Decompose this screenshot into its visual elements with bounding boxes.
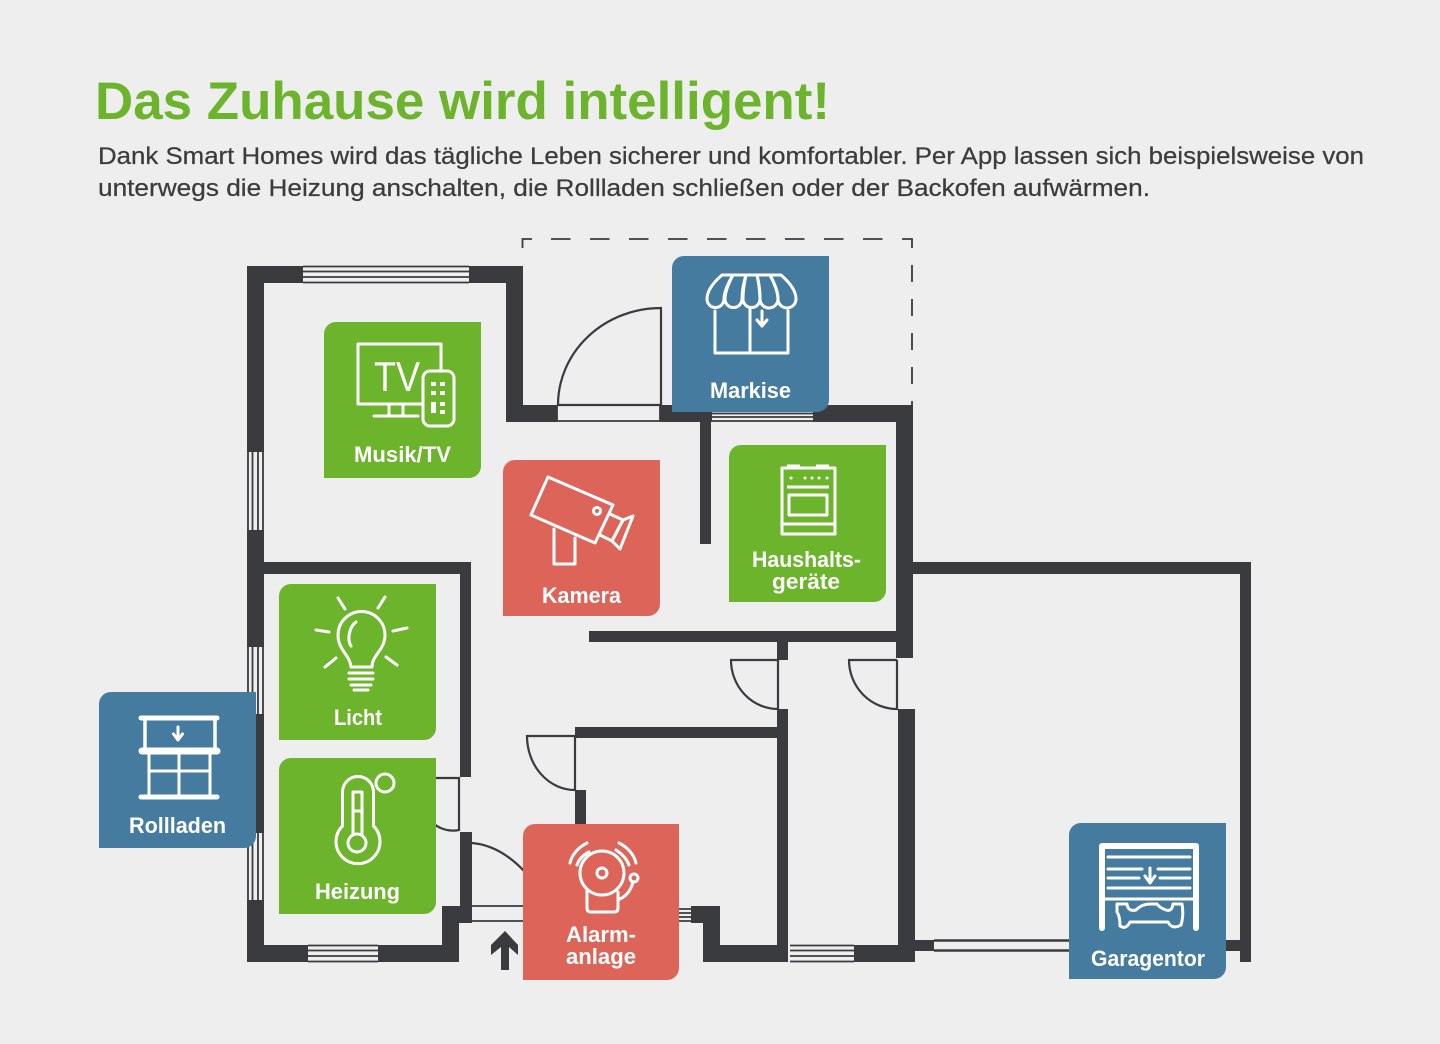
- tile: Alarmanlage: [523, 824, 679, 980]
- label: Rollladen: [129, 813, 226, 838]
- label: [752, 547, 861, 594]
- windows: [248, 266, 1069, 962]
- title: Das Zuhause wird intelligent!: [95, 72, 830, 131]
- intro text: Dank Smart Homes wird das tägliche Leben sicherer und komfortabler. Per App lassen sich beispielsweise von: [98, 143, 1364, 170]
- label: Alarm-: [566, 922, 636, 947]
- floor plan walls: [247, 266, 1251, 962]
- label: Kamera: [542, 583, 622, 608]
- tile: Haushaltsgeräte: [729, 445, 886, 602]
- label: Heizung: [315, 879, 400, 904]
- icon: thermometer: [336, 774, 394, 864]
- icon: garage door with car: [1102, 846, 1196, 928]
- tile: Rollladen: [99, 692, 256, 848]
- label: geräte: [772, 569, 840, 594]
- label: [566, 922, 636, 969]
- tile: Garagentor: [1069, 823, 1226, 979]
- tile: Licht: [279, 584, 436, 740]
- icon: security camera: [531, 477, 633, 564]
- icon: alarm bell: [570, 843, 638, 912]
- icon: tv and remote: TV: [374, 353, 420, 400]
- tile: Musik/TV: [324, 322, 481, 478]
- tile: Kamera: [503, 460, 660, 616]
- dashed outline: terrace awning area: [522, 239, 912, 405]
- label: Markise: [710, 378, 791, 403]
- tile: Markise: [672, 256, 829, 412]
- icon: tv and remote: [358, 344, 454, 426]
- icon: awning: [707, 275, 796, 353]
- label: Garagentor: [1091, 946, 1205, 971]
- label: Musik/TV: [354, 442, 451, 467]
- label: Licht: [334, 705, 383, 730]
- icon: window with shutter: [141, 718, 217, 797]
- icon: stove: [782, 466, 835, 534]
- tile: Heizung: [279, 758, 436, 914]
- label: anlage: [566, 944, 636, 969]
- doors: [430, 308, 897, 921]
- label: Haushalts-: [752, 547, 861, 572]
- intro text: unterwegs die Heizung anschalten, die Rollladen schließen oder der Backofen aufwärmen.: [98, 175, 1150, 202]
- intro text: [98, 143, 1364, 202]
- entrance arrow: [491, 931, 518, 970]
- icon: light bulb: [316, 597, 407, 690]
